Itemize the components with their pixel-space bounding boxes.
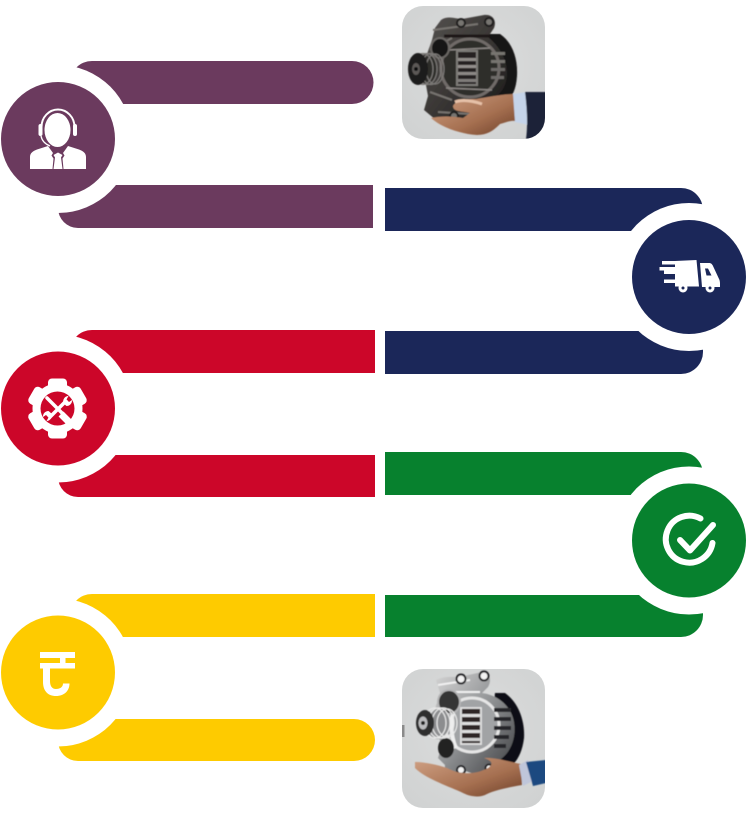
icon: support agent with headset bbox=[30, 110, 86, 169]
panel: yellow step bbox=[0, 594, 375, 761]
suit sleeve bbox=[525, 92, 546, 139]
red circle bbox=[1, 352, 115, 466]
panel: navy step bbox=[385, 188, 752, 374]
yellow top bar bbox=[70, 594, 375, 637]
red top bar bbox=[70, 330, 375, 373]
icon: check mark in open circle bbox=[666, 516, 713, 563]
yellow circle bbox=[1, 616, 115, 730]
new alternator bbox=[433, 672, 524, 776]
navy top bar bbox=[385, 188, 703, 231]
green circle bbox=[632, 484, 746, 598]
navy bottom bar bbox=[385, 331, 703, 374]
red bottom bar bbox=[50, 455, 375, 497]
edge mark on photo background bbox=[402, 725, 404, 737]
shirt cuff bbox=[518, 760, 532, 786]
panel: green step bbox=[385, 452, 752, 637]
purple circle bbox=[1, 82, 115, 196]
open palm bbox=[415, 758, 522, 796]
panel: red step bbox=[0, 330, 375, 497]
icon: fast delivery truck bbox=[660, 260, 720, 292]
green top bar bbox=[385, 452, 703, 495]
worn pulley bbox=[408, 53, 444, 85]
green bottom bar bbox=[385, 595, 703, 637]
new pulley bbox=[416, 708, 457, 739]
navy circle bbox=[632, 220, 746, 334]
suit sleeve bbox=[526, 760, 546, 786]
purple top bar bbox=[70, 61, 374, 104]
panel: purple step bbox=[0, 61, 374, 228]
hand holding alternator bbox=[431, 94, 515, 135]
photo: worn alternator held in a hand bbox=[402, 6, 546, 139]
worn alternator bbox=[424, 15, 517, 122]
purple bottom bar bbox=[50, 185, 373, 228]
icon: rupee symbol bbox=[40, 652, 75, 696]
shirt cuff bbox=[513, 92, 529, 125]
yellow bottom bar bbox=[50, 719, 375, 761]
icon: gear with wrench and screwdriver bbox=[27, 378, 88, 438]
photo: new alternator resting on an open hand bbox=[402, 669, 546, 808]
